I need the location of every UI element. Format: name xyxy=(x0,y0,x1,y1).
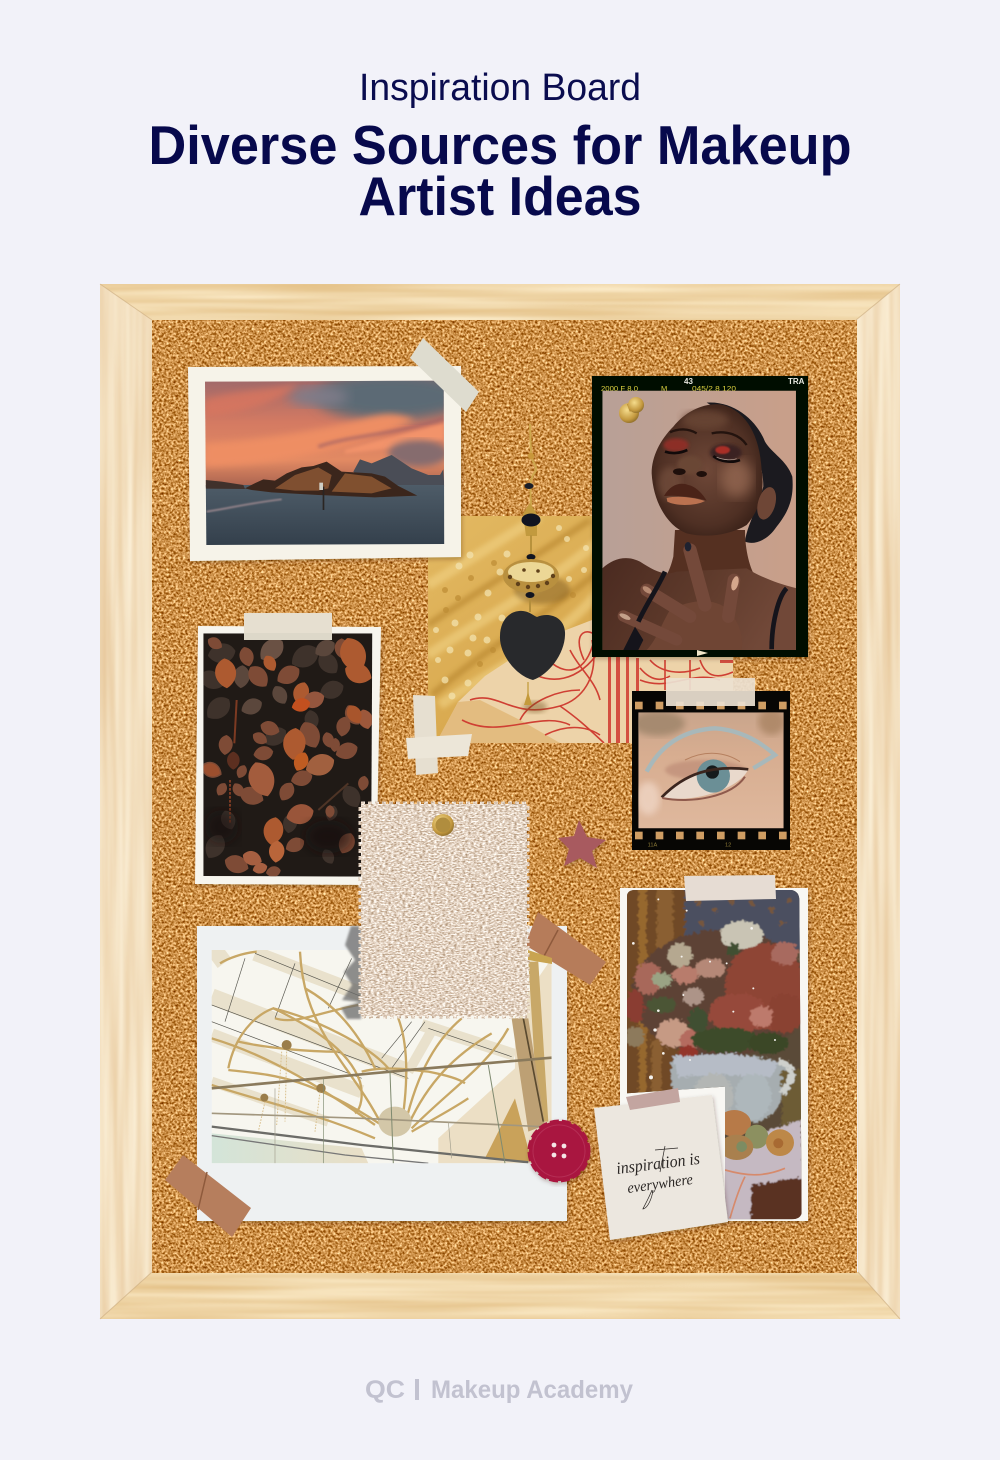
neck xyxy=(668,530,753,574)
photo: sunset over island xyxy=(188,366,468,561)
red lace section xyxy=(436,620,733,743)
red button xyxy=(529,1121,589,1181)
paint specks xyxy=(632,898,776,1091)
film codes xyxy=(648,843,731,849)
gold arcs xyxy=(212,952,508,1138)
cream wall right xyxy=(438,958,552,1163)
photo: portrait in black film frame xyxy=(592,376,808,657)
title: Diverse Sources for Makeup Artist Ideas xyxy=(148,114,852,227)
brown tape: beside swatch xyxy=(525,912,606,985)
film frame captions xyxy=(601,377,805,393)
hair and bun xyxy=(707,403,793,543)
fruits xyxy=(718,1110,794,1160)
photo: eye in film strip xyxy=(632,691,790,850)
tape: top right of sunset photo xyxy=(410,338,479,412)
panel: cork board with wooden frame xyxy=(100,284,900,1319)
film codes: 11A xyxy=(648,843,658,849)
film frame captions: TRA xyxy=(788,377,805,386)
footer logo: QC | Makeup Academy: Makeup Academy xyxy=(431,1376,633,1404)
film frame captions: 2000 F 8.0 xyxy=(601,384,638,393)
bright orange leaves xyxy=(201,634,375,875)
film frame captions: 045/2.8 120 xyxy=(692,384,736,393)
gold push pin xyxy=(619,397,644,423)
eye makeup and features xyxy=(663,438,689,452)
film codes: 12 xyxy=(725,843,731,849)
tape: top of leaves photo xyxy=(244,613,332,640)
earring charm: gold beads and black heart xyxy=(500,424,570,713)
head xyxy=(652,404,763,536)
footer logo: QC | Makeup Academy: QC xyxy=(365,1376,405,1404)
mid brown leaves xyxy=(198,634,374,878)
hanging chains xyxy=(258,1052,320,1132)
black heart xyxy=(500,611,565,680)
railings xyxy=(212,1058,552,1163)
hand on neck xyxy=(647,602,724,650)
title: Diverse Sources for Makeup Artist Ideas: Diverse Sources for Makeup xyxy=(148,114,852,176)
photo: glass and gold architecture polaroid xyxy=(197,926,567,1221)
handwritten note text: inspiration is xyxy=(615,1149,701,1178)
tape: top of film strip xyxy=(666,678,755,706)
film frame captions: 43 xyxy=(684,377,693,386)
table cloth xyxy=(715,1120,805,1223)
tape: crossed tape pieces xyxy=(406,695,472,775)
wall panels xyxy=(627,890,687,1094)
vase xyxy=(671,1055,792,1123)
star decoration xyxy=(558,820,606,868)
handwritten note text xyxy=(615,1149,701,1197)
frame arrow xyxy=(697,650,708,656)
brown tape: bottom left of polaroid xyxy=(165,1155,251,1237)
note: inspiration is everywhere xyxy=(594,1088,728,1240)
photo: terracotta leaves xyxy=(195,626,381,885)
bra straps xyxy=(638,572,665,622)
sprocket holes xyxy=(635,702,787,839)
cork surface xyxy=(152,320,857,1273)
handwritten note text: everywhere xyxy=(626,1172,694,1197)
flower mass xyxy=(632,930,812,1057)
background dark leaves xyxy=(196,633,365,866)
pink tape on note xyxy=(626,1088,680,1110)
swatch drop shadow xyxy=(341,926,361,1019)
title: Diverse Sources for Makeup Artist Ideas: Artist Ideas xyxy=(358,165,642,227)
cream roof beams xyxy=(212,950,515,1122)
tape: top of painting xyxy=(684,875,776,901)
brass pin xyxy=(432,814,454,836)
shoulders and chest xyxy=(602,558,797,650)
film frame captions: M xyxy=(661,384,667,393)
glass floor xyxy=(212,1133,368,1163)
eyebrow heading: Inspiration Board: Inspiration Board xyxy=(359,67,641,109)
photo: flower painting xyxy=(620,883,812,1223)
wooden frame xyxy=(100,284,900,1319)
fabric swatch with zigzag edge xyxy=(361,804,527,1016)
fabric: gold and red sari textile xyxy=(428,516,733,743)
column hub xyxy=(378,1107,412,1137)
